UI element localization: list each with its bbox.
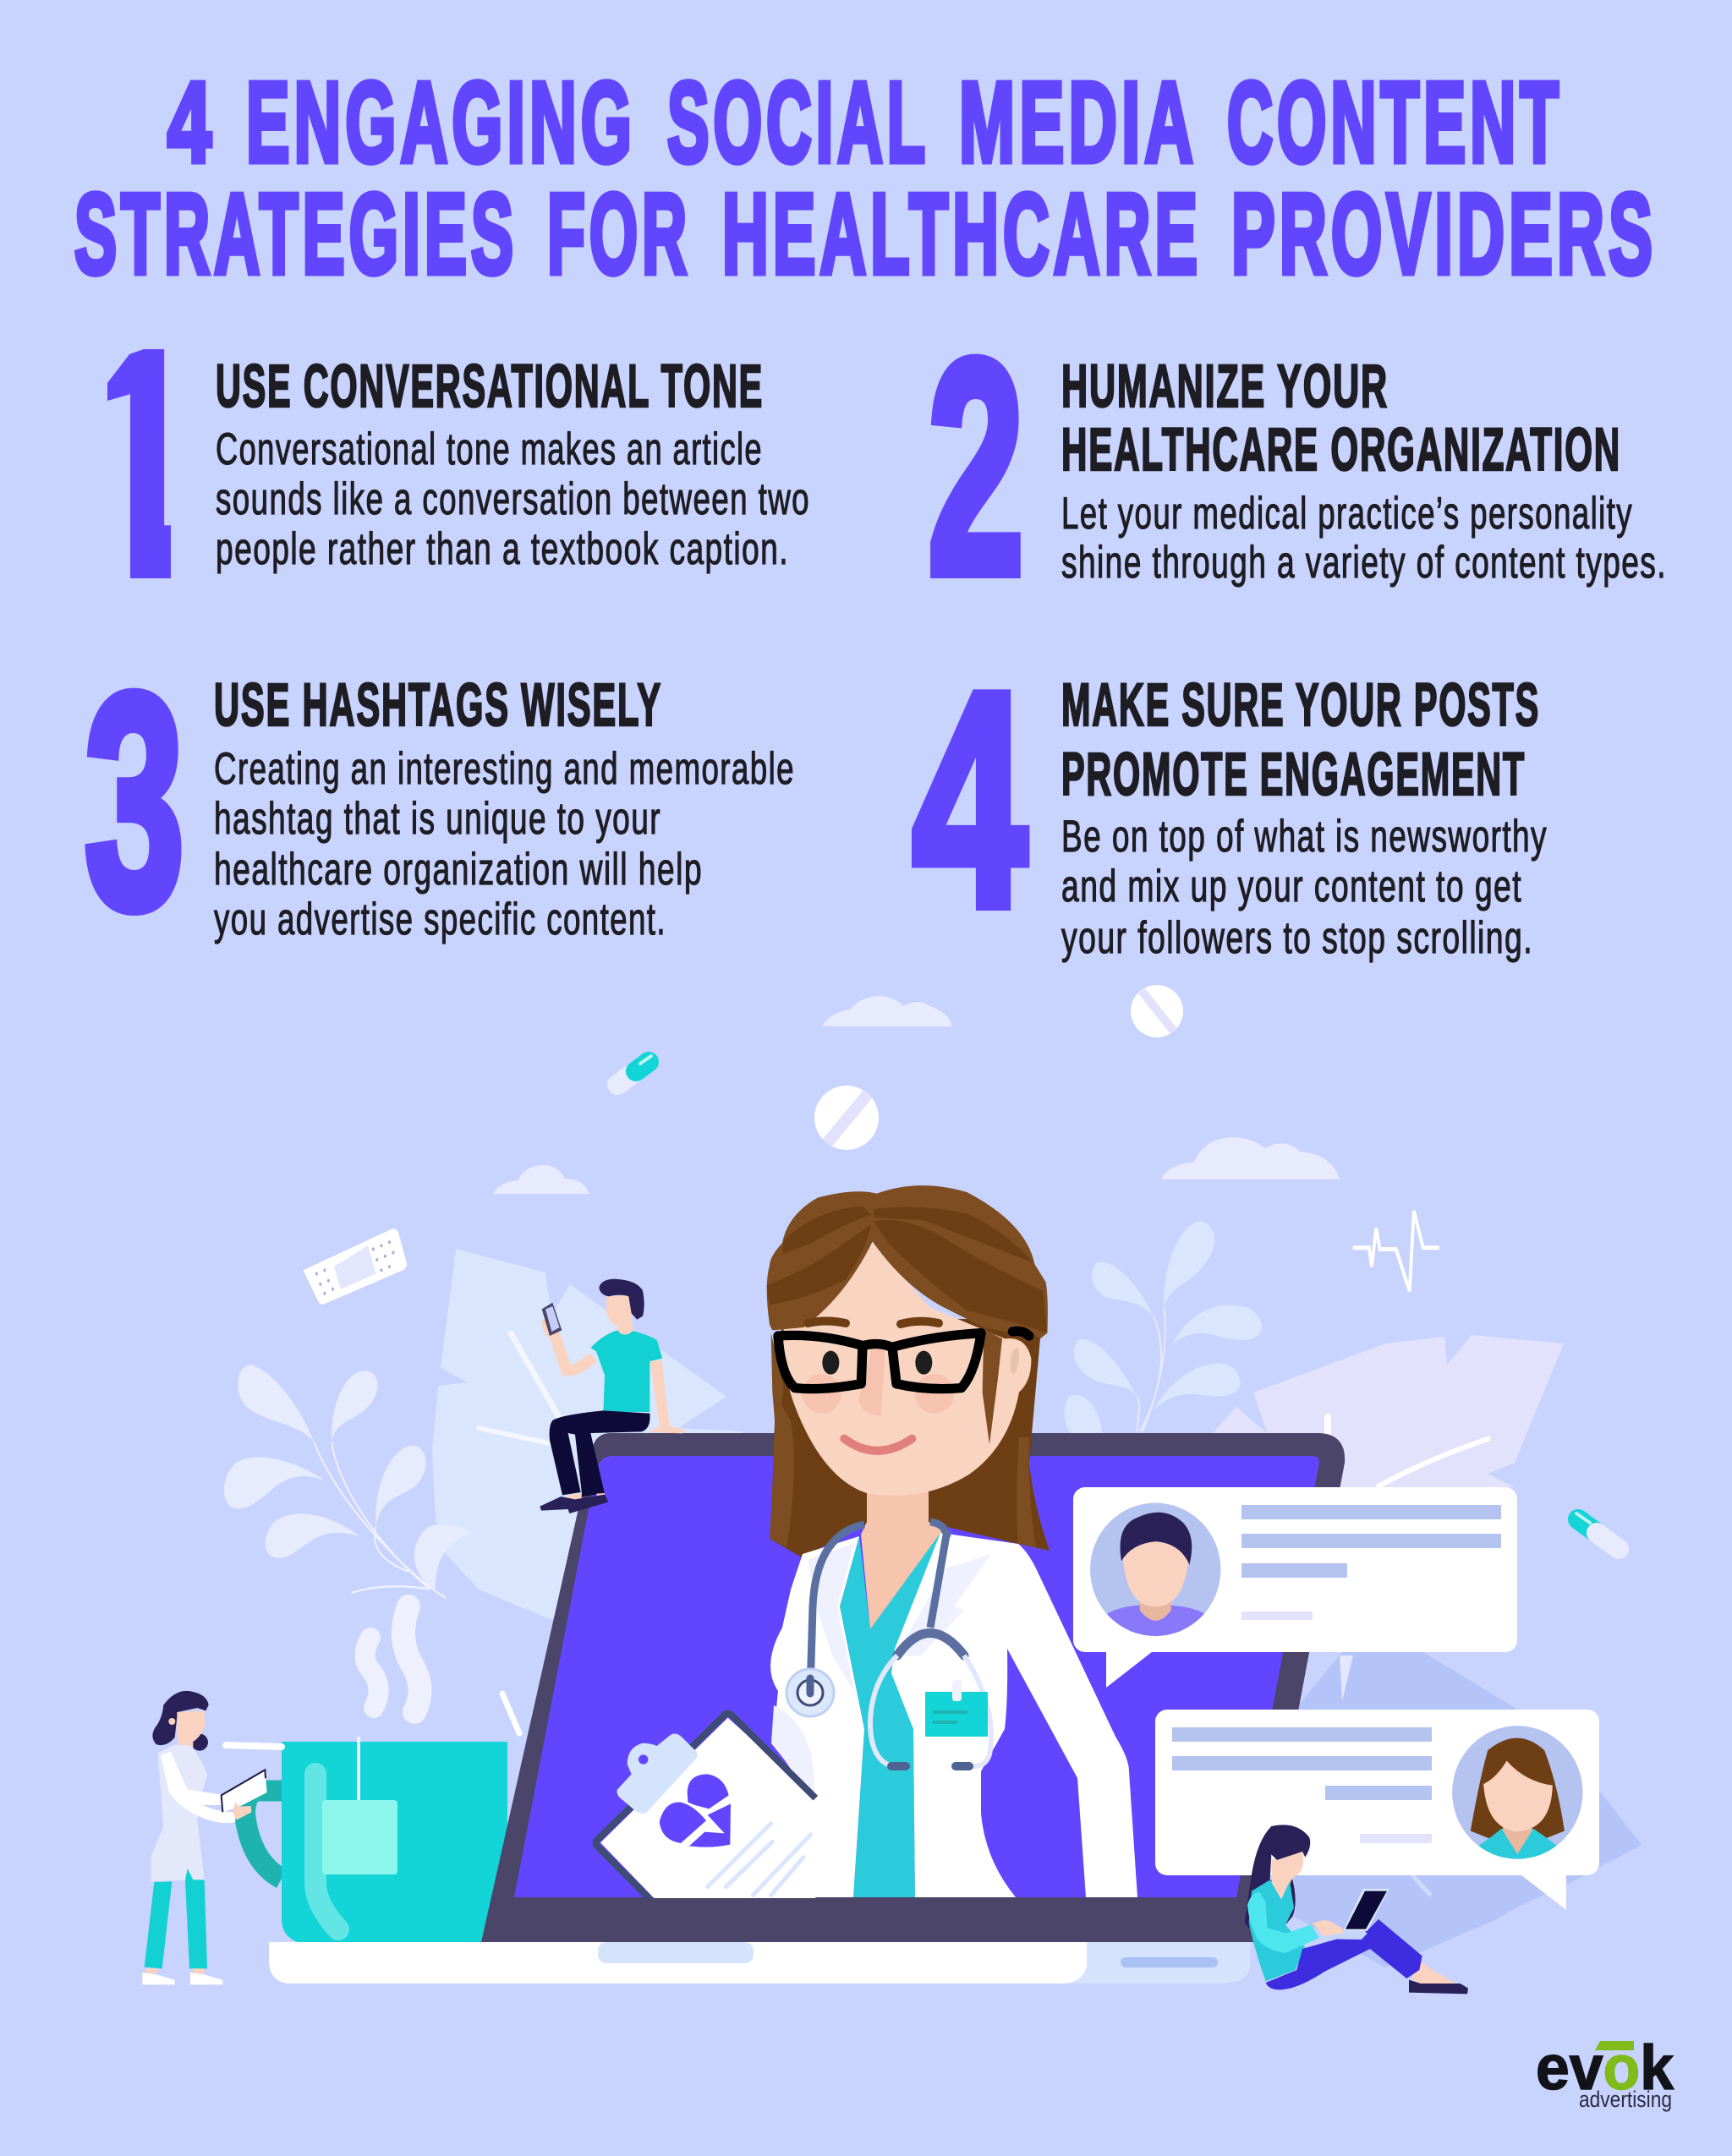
- number 2: 2: [928, 298, 1024, 637]
- icon: bandage: [303, 1228, 407, 1304]
- capsule pill top: [617, 1056, 651, 1085]
- hair back: [770, 1319, 1050, 1557]
- plant right: [1064, 1221, 1262, 1435]
- avatar woman: [1452, 1726, 1583, 1866]
- shirt: [590, 1330, 662, 1412]
- nurse coat: [151, 1744, 207, 1881]
- woman face: [1271, 1852, 1303, 1900]
- scrubs: [840, 1533, 949, 1897]
- paper lines: [708, 1824, 810, 1896]
- leg skin: [1411, 1962, 1457, 1985]
- nurse face: [177, 1710, 206, 1756]
- step 4 text: [1061, 672, 1548, 963]
- nurse arm: [161, 1752, 235, 1823]
- step 3 text: USE HASHTAGS WISELY: [214, 672, 662, 739]
- avatar man: [1090, 1503, 1220, 1645]
- title: HEALTHCARE: [722, 170, 1202, 298]
- big leaf right upper: [1213, 1335, 1564, 1497]
- title: 4: [167, 58, 216, 186]
- coat left: [770, 1536, 864, 1897]
- step 1 text: sounds like a conversation between two: [216, 474, 810, 524]
- step 4 text: and mix up your content to get: [1061, 862, 1522, 911]
- nurse hand: [233, 1803, 251, 1819]
- step 3 text: [214, 672, 795, 944]
- eyebrows: [808, 1321, 939, 1324]
- woman shirt: [1249, 1880, 1305, 1981]
- clipboard: [596, 1714, 815, 1898]
- sleeve: [1247, 1892, 1319, 1953]
- cheeks and nose: [802, 1350, 954, 1416]
- woman with laptop: [1245, 1825, 1468, 1994]
- chat bubble 1: [1073, 1487, 1517, 1688]
- heart icon: [660, 1774, 731, 1847]
- title: MEDIA: [959, 58, 1198, 186]
- woman hair: [1245, 1825, 1310, 1928]
- trousers: [550, 1410, 650, 1497]
- step 3 text: you advertise specific content.: [214, 895, 666, 944]
- nurse hair: [152, 1691, 209, 1745]
- mouth: [844, 1439, 912, 1451]
- coat right: [891, 1533, 1137, 1897]
- step 3 text: Creating an interesting and memorable: [214, 744, 795, 794]
- steam: [365, 1606, 419, 1712]
- right arm: [649, 1360, 687, 1433]
- chat bubble 2: [1155, 1710, 1599, 1910]
- big leaf left: [432, 1249, 743, 1619]
- title: STRATEGIES: [74, 170, 518, 298]
- coffee mug: [245, 1737, 507, 1942]
- title: ENGAGING: [246, 58, 636, 186]
- clouds: [493, 996, 1340, 1194]
- woman hand: [1313, 1920, 1343, 1936]
- number 4: 4: [913, 630, 1028, 970]
- neck: [861, 1488, 943, 1629]
- logo: evok: [1536, 2033, 1674, 2103]
- nurse ankles: [145, 1968, 205, 1973]
- hair top: [767, 1185, 1048, 1338]
- step 3 text: healthcare organization will help: [214, 845, 703, 895]
- nurse: [142, 1691, 267, 1984]
- laptop frame: [481, 1433, 1345, 1942]
- man sitting on laptop: [540, 1279, 687, 1513]
- mug lines: [226, 1694, 519, 1747]
- step 1 text: USE CONVERSATIONAL TONE: [216, 353, 764, 420]
- clipboard clip: [617, 1734, 698, 1814]
- glasses: [778, 1331, 1029, 1389]
- face and hair: [767, 1185, 1048, 1496]
- stethoscope: [787, 1522, 991, 1766]
- shoes: [567, 1493, 605, 1499]
- step 2 text: HUMANIZE YOUR: [1061, 353, 1389, 420]
- icon: heartbeat line: [1353, 1211, 1439, 1291]
- doctor: [596, 1185, 1137, 1898]
- logo: advertising: [1579, 2087, 1672, 2112]
- nurse trousers: [145, 1869, 207, 1968]
- step 4 text: your followers to stop scrolling.: [1061, 913, 1533, 963]
- trousers: [1266, 1919, 1422, 1989]
- face: [783, 1241, 1031, 1496]
- small laptop: [1319, 1930, 1368, 1940]
- plant left: [224, 1365, 473, 1598]
- phone: [542, 1303, 562, 1336]
- step 2 text: [1061, 353, 1667, 588]
- text: 1: [101, 296, 185, 636]
- badge: [925, 1680, 988, 1737]
- eyes: [822, 1351, 932, 1375]
- big leaf right lower: [1269, 1652, 1642, 1967]
- laptop base: [269, 1942, 1250, 1984]
- step 1 text: Conversational tone makes an article: [216, 424, 763, 474]
- step 1 text: [216, 353, 810, 574]
- title: SOCIAL: [667, 58, 929, 186]
- number 3: 3: [85, 632, 184, 971]
- nurse shoes: [142, 1973, 222, 1984]
- tablet pill top right: [1131, 985, 1183, 1037]
- head: [606, 1295, 636, 1336]
- laptop screen: [514, 1456, 1319, 1897]
- step 3 text: hashtag that is unique to your: [214, 794, 661, 844]
- tablet: [222, 1770, 267, 1812]
- capsule pill right: [1576, 1513, 1619, 1549]
- woman shoes: [1409, 1980, 1468, 1994]
- tablet pill center: [814, 1086, 879, 1150]
- laptop: [269, 1433, 1345, 1984]
- left arm: [554, 1333, 594, 1371]
- hair strands: [771, 1333, 784, 1443]
- title: FOR: [547, 170, 691, 298]
- step 1 text: people rather than a textbook caption.: [216, 524, 789, 574]
- title: [74, 58, 1657, 298]
